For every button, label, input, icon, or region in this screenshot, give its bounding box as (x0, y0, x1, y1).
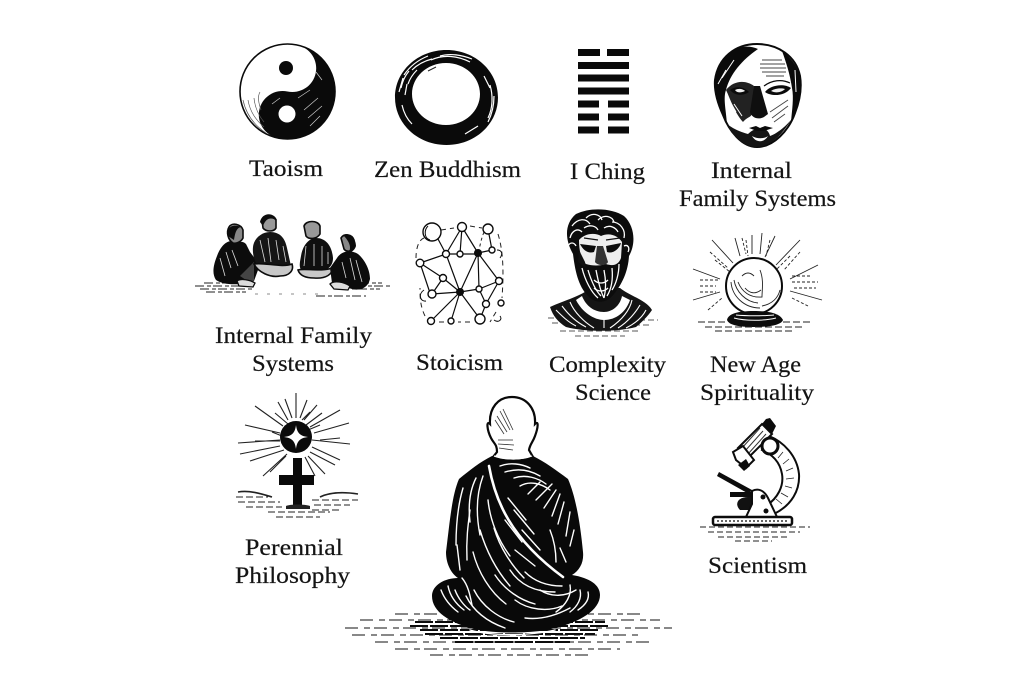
icon: crystal ball with rays (693, 233, 822, 331)
label: New Age Spirituality (700, 352, 815, 405)
label: Complexity Science: Complexity (549, 352, 667, 377)
label: I Ching: I Ching (570, 159, 646, 184)
label: Perennial Philosophy: Philosophy (235, 563, 351, 588)
icon: star and cross (236, 393, 358, 517)
ground shadow (345, 614, 672, 655)
label: Stoicism: Stoicism (416, 350, 503, 375)
label: New Age Spirituality: Spirituality (700, 380, 815, 405)
label: Complexity Science (549, 352, 667, 405)
icon: microscope (700, 418, 810, 541)
label: Internal Family Systems (top): Internal (711, 158, 792, 183)
label: Perennial Philosophy: Perennial (245, 535, 343, 560)
icon: network graph (416, 222, 504, 324)
label: Internal Family Systems (second row) (215, 323, 373, 376)
label: Complexity Science: Science (575, 380, 651, 405)
label: Internal Family Systems (top): Family Systems (679, 186, 836, 211)
label: Internal Family Systems (second row): Internal Family (215, 323, 373, 348)
icon: I Ching hexagram (578, 49, 629, 134)
icon: four seated people in a circle (195, 214, 390, 296)
icon: bearded philosopher bust (548, 209, 658, 336)
label: Taoism: Taoism (249, 156, 323, 181)
label: Internal Family Systems (second row): Systems (252, 351, 334, 376)
icon: enso circle (395, 50, 498, 145)
head (487, 397, 538, 461)
label: New Age Spirituality: New Age (710, 352, 801, 377)
icon: face (715, 44, 801, 147)
icon: yin yang (240, 40, 344, 148)
label: Scientism: Scientism (708, 553, 807, 578)
illustration: seated monk seen from behind (345, 397, 672, 655)
label: Internal Family Systems (top) (679, 158, 836, 211)
robe folds (441, 464, 588, 634)
label: Perennial Philosophy (235, 535, 351, 588)
label: Zen Buddhism: Zen Buddhism (374, 157, 521, 182)
